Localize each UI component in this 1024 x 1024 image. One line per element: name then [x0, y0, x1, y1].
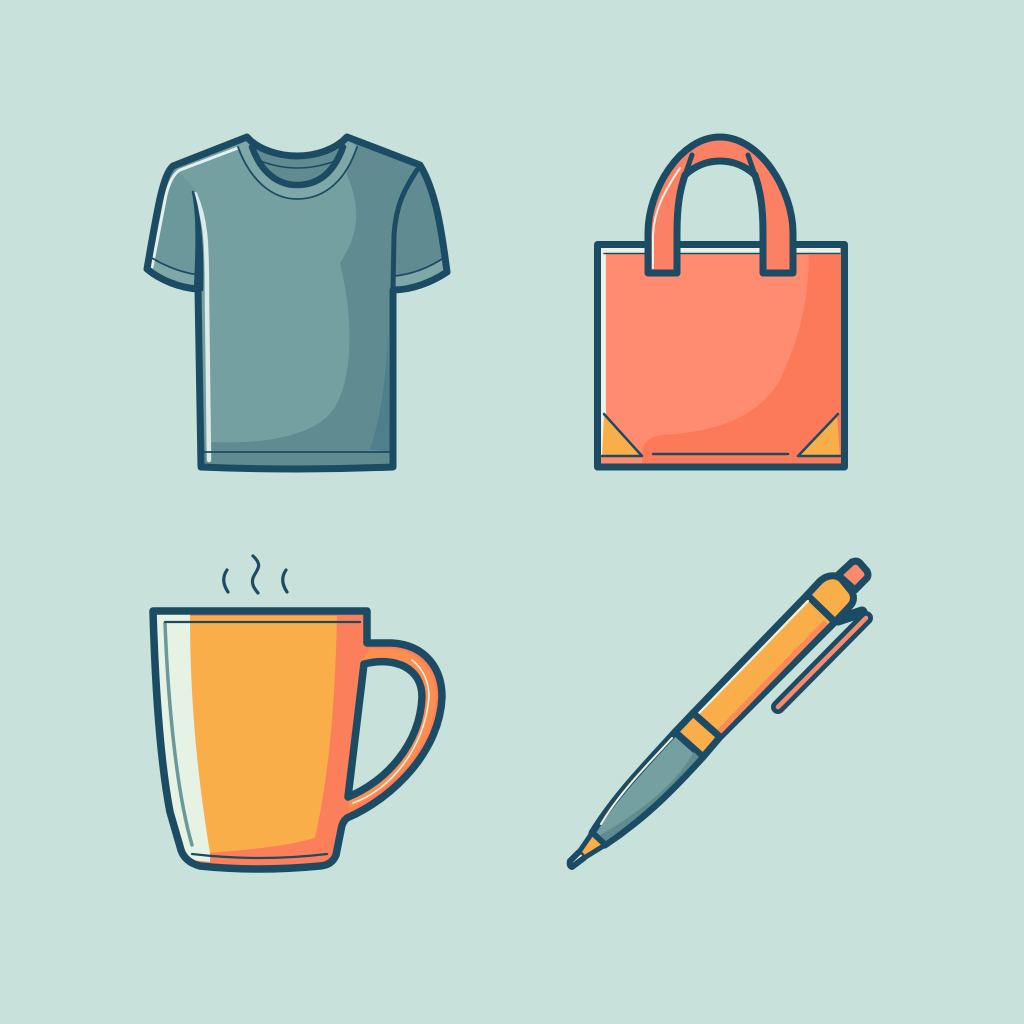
pen grip: [592, 732, 703, 845]
icon: pen: [570, 561, 868, 867]
pen collar: [675, 713, 720, 757]
icon: tote bag: [597, 137, 844, 467]
pen clip: [778, 612, 866, 707]
icon: coffee mug: [153, 556, 442, 869]
pen barrel: [693, 595, 835, 737]
pen tip: [579, 833, 605, 858]
icon: t-shirt: [147, 137, 447, 469]
pen button: [838, 561, 868, 590]
pen cap: [807, 576, 853, 622]
icon: steam: [224, 556, 287, 593]
